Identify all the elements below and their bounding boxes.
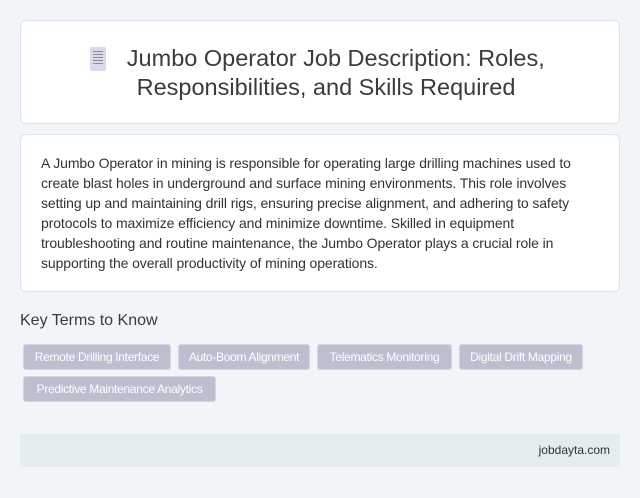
- tag: Digital Drift Mapping: [470, 350, 572, 364]
- tag: [459, 344, 583, 370]
- tag: [23, 344, 171, 370]
- tag: Telematics Monitoring: [330, 350, 439, 364]
- header card: [20, 20, 620, 124]
- description text: A Jumbo Operator in mining is responsible for operating large drilling machines used to create blast holes in underground and surface mining environments. This role involves setting up and maintaining drill rigs, ensuring precise alignment, and adhering to safety protocols to maximize efficiency and minimize downtime. Skilled in equipment troubleshooting and routine maintenance, the Jumbo Operator plays a crucial role in supporting the overall productivity of mining operations.: [41, 155, 571, 271]
- tag: Auto-Boom Alignment: [189, 350, 299, 364]
- description card: [20, 134, 620, 292]
- tag: [178, 344, 310, 370]
- tag: Remote Drilling Interface: [35, 350, 159, 364]
- footer: [20, 434, 620, 467]
- heading: key terms: Key Terms to Know: [20, 312, 158, 329]
- tag: Predictive Maintenance Analytics: [37, 382, 202, 396]
- title: Jumbo Operator Job Description: Roles, Responsibilities, and Skills Required: [127, 45, 545, 100]
- footer text: jobdayta.com: [539, 443, 610, 457]
- tag: [317, 344, 452, 370]
- tag: [23, 376, 216, 402]
- icon: document: [90, 47, 106, 71]
